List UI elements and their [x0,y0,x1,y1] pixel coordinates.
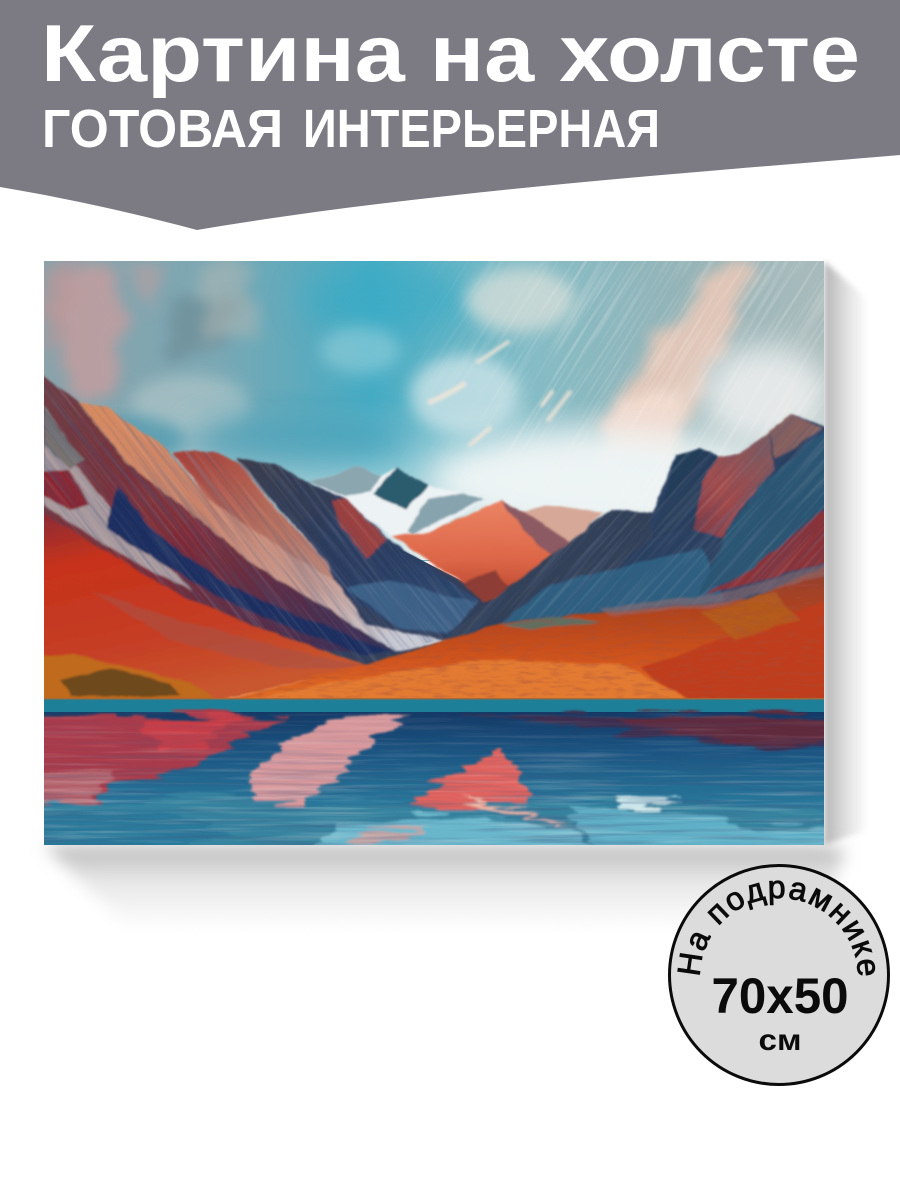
subtitle: ГОТОВАЯ [42,99,283,159]
canvas painting: mountain lake [44,261,824,845]
left mountain range [30,365,479,656]
title: Картина на холсте [41,9,860,99]
subtitle: ИНТЕРЬЕРНАЯ [303,99,660,159]
left red slope [44,512,366,698]
far pink peak [520,505,603,548]
orange valley floor [213,560,835,702]
valley floor grain [234,570,824,698]
valley shadow base [306,550,497,680]
left mountain brush texture [44,384,478,664]
curved label: На подрамнике [677,880,876,976]
right mountain range [443,414,840,640]
snowy peak [308,467,484,537]
painted sky [44,261,824,561]
canvas wall shadow [44,261,868,930]
lake [44,698,824,845]
orange central peak [392,500,572,604]
right mountain brush texture [450,415,824,637]
subtitle [42,99,660,159]
size unit: см [758,1024,802,1057]
header banner [0,0,900,230]
size value: 70x50 [712,968,848,1024]
size badge [668,864,890,1086]
badge circle [670,866,888,1084]
